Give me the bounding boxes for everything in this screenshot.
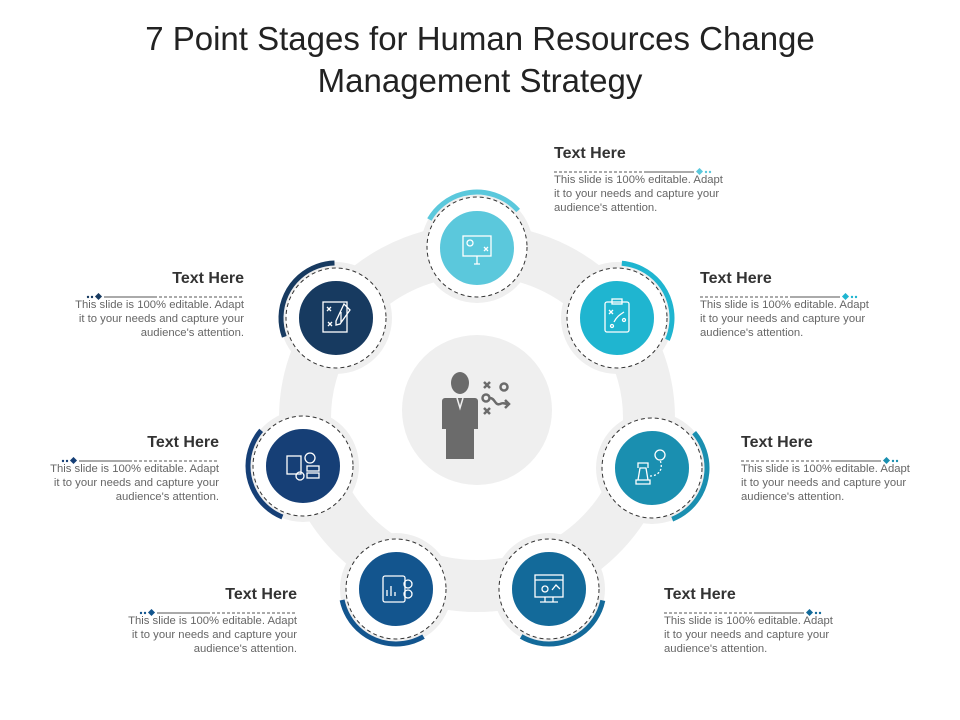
text block: upper right: Text Here bbox=[700, 270, 772, 287]
text block: left bbox=[50, 434, 219, 503]
text block: top: This slide is 100% editable. Adapt bbox=[554, 174, 723, 186]
text block: right: This slide is 100% editable. Adapt bbox=[741, 463, 910, 475]
node 1 top bbox=[402, 172, 552, 322]
node 3 right bbox=[575, 391, 729, 545]
node 2 upper right bbox=[557, 258, 677, 378]
text block: lower left bbox=[128, 586, 297, 655]
text block: top: audience's attention. bbox=[554, 202, 657, 214]
node 5 lower left bbox=[321, 514, 471, 664]
text block: lower left: This slide is 100% editable. Adapt bbox=[128, 615, 297, 627]
text block: left: audience's attention. bbox=[116, 491, 219, 503]
text block: upper left: This slide is 100% editable. Adapt bbox=[75, 299, 244, 311]
text block: upper left bbox=[75, 270, 244, 339]
text block: lower right bbox=[664, 586, 833, 655]
text block: upper left: audience's attention. bbox=[141, 327, 244, 339]
text block: right: Text Here bbox=[741, 434, 813, 451]
text block: left: it to your needs and capture your bbox=[54, 477, 219, 489]
text block: lower right: audience's attention. bbox=[664, 643, 767, 655]
gray ring background bbox=[247, 191, 708, 645]
title: 7 Point Stages for Human Resources Change bbox=[145, 20, 815, 57]
node 6 left bbox=[231, 394, 375, 538]
text block: top bbox=[554, 145, 723, 214]
text block: right: audience's attention. bbox=[741, 491, 844, 503]
text block: upper left: Text Here bbox=[172, 270, 244, 287]
text block: left: This slide is 100% editable. Adapt bbox=[50, 463, 219, 475]
text block: lower right: This slide is 100% editable. Adapt bbox=[664, 615, 833, 627]
text block: right bbox=[741, 434, 910, 503]
text block: lower left: it to your needs and capture your bbox=[132, 629, 297, 641]
text block: right: it to your needs and capture your bbox=[741, 477, 906, 489]
text block: upper right: audience's attention. bbox=[700, 327, 803, 339]
text block: upper right bbox=[700, 270, 869, 339]
text block: upper right: it to your needs and capture your bbox=[700, 313, 865, 325]
text block: lower right: it to your needs and capture your bbox=[664, 629, 829, 641]
text block: upper right: This slide is 100% editable. Adapt bbox=[700, 299, 869, 311]
text block: upper left: it to your needs and capture your bbox=[79, 313, 244, 325]
center circle with person icon bbox=[402, 335, 552, 485]
text block: top: Text Here bbox=[554, 145, 626, 162]
node 7 upper left bbox=[266, 248, 406, 388]
text block: lower left: Text Here bbox=[225, 586, 297, 603]
title bbox=[145, 20, 815, 99]
title: Management Strategy bbox=[318, 62, 642, 99]
text block: lower left: audience's attention. bbox=[194, 643, 297, 655]
text block: lower right: Text Here bbox=[664, 586, 736, 603]
nodes bbox=[231, 172, 729, 664]
text block: left: Text Here bbox=[147, 434, 219, 451]
node 4 lower right bbox=[484, 524, 614, 654]
text block: top: it to your needs and capture your bbox=[554, 188, 719, 200]
